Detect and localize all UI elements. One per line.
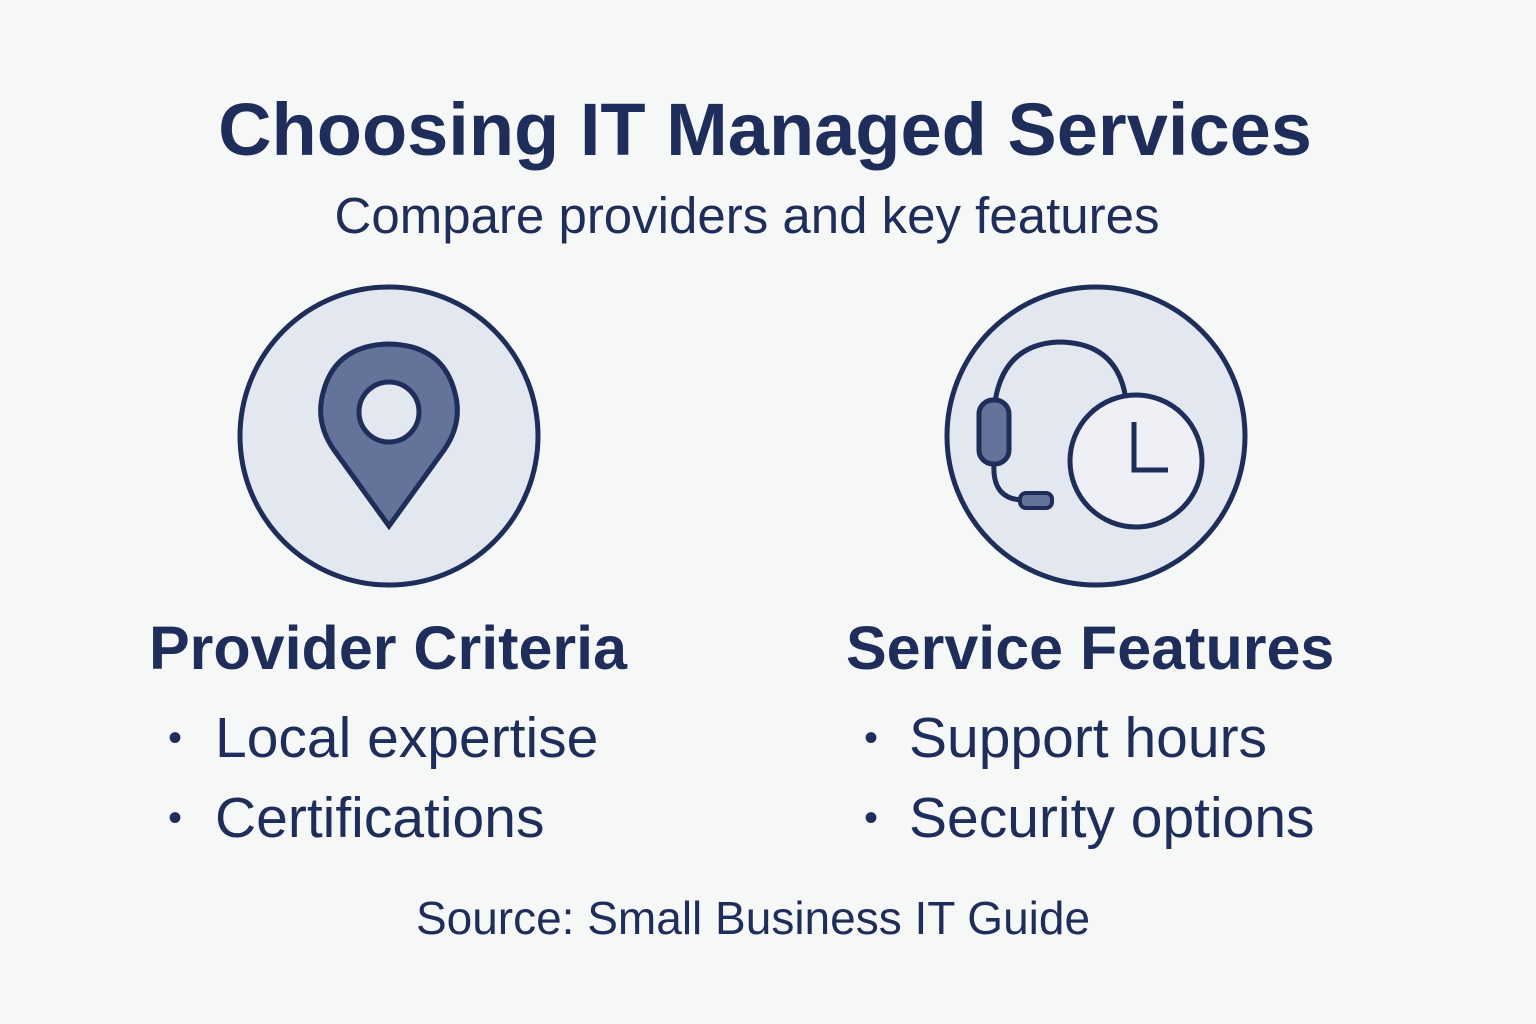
list: service features: •	[864, 716, 878, 760]
icon: headset with clock	[944, 284, 1248, 588]
title: Choosing IT Managed Services	[218, 88, 1312, 171]
subtitle: Compare providers and key features	[335, 187, 1159, 244]
icon: location pin	[238, 284, 540, 588]
list: service features: •	[864, 796, 878, 840]
list: provider criteria: •	[168, 716, 182, 760]
list: provider criteria: Certifications	[215, 786, 544, 850]
list: service features: Support hours	[909, 706, 1267, 770]
heading: Provider Criteria: Provider Criteria	[149, 614, 627, 682]
list: provider criteria: Local expertise	[215, 706, 598, 770]
list: service features: Security options	[909, 786, 1315, 850]
list: service features	[864, 706, 1315, 850]
heading: Service Features: Service Features	[846, 614, 1334, 682]
list: provider criteria	[168, 706, 598, 850]
list: provider criteria: •	[168, 796, 182, 840]
source note: Source: Small Business IT Guide	[416, 892, 1090, 944]
